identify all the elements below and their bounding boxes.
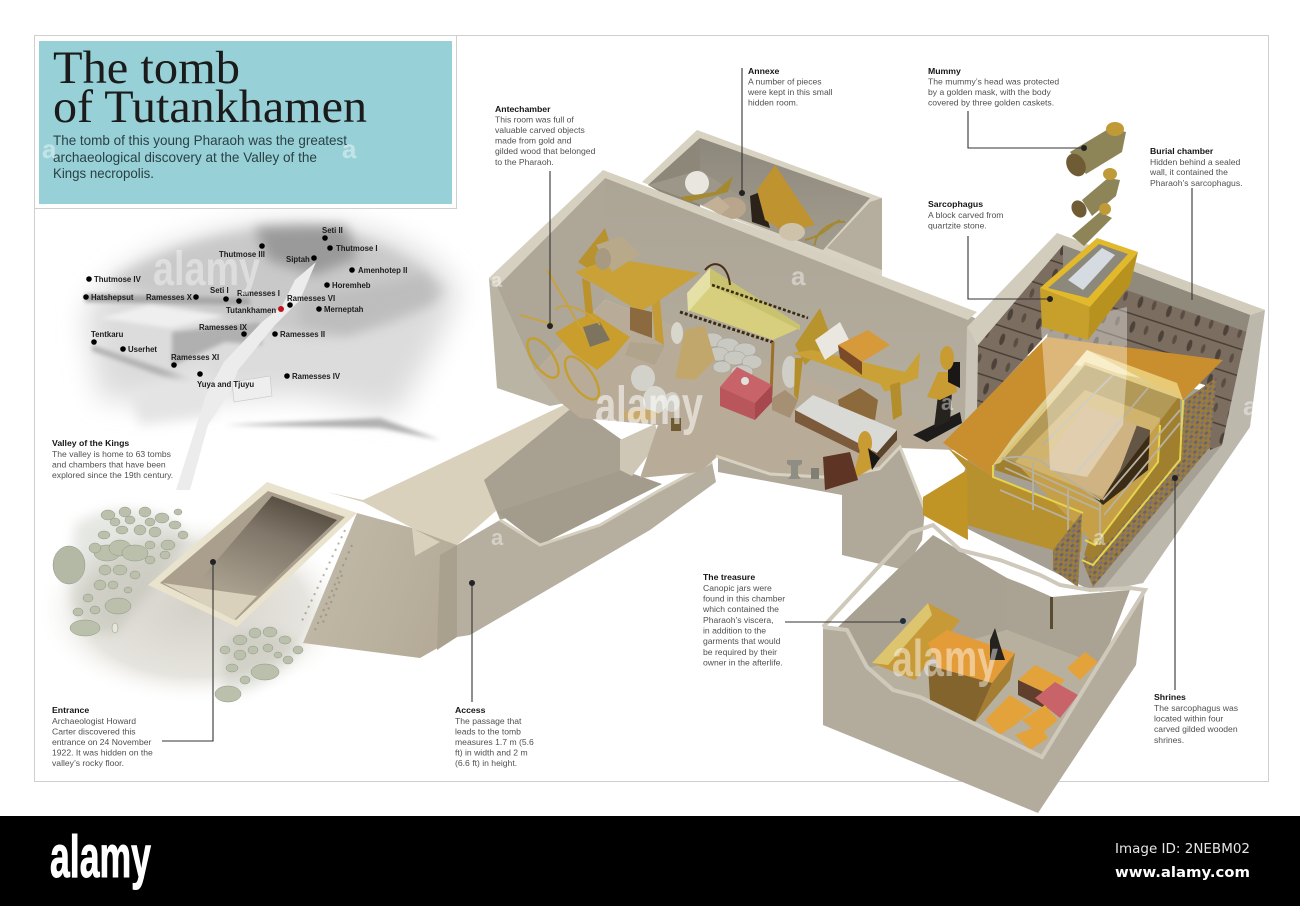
golden caskets [1062,122,1126,246]
callout: antechamber: gilded wood that belonged [495,146,596,156]
shrine front panel [948,448,1083,552]
treasure dark door slit [1050,597,1053,629]
callout: treasure: be required by their [703,647,777,657]
passage top slab [327,402,574,545]
callout: mummy: covered by three golden caskets. [928,98,1054,108]
shrine roof [943,337,1223,477]
mural left wall [977,245,1063,410]
callout: entrance: Archaeologist Howard [52,716,136,726]
light beam [1041,307,1127,477]
callout: shrines: shrines. [1154,735,1184,745]
callout: access: (6.6 ft) in height. [455,758,517,768]
glass roof [1005,362,1180,497]
callout: valley of the kings: The valley is home to 63 tombs [52,449,171,459]
watermarks: a [791,261,806,291]
map labels: Tutankhamen [226,306,276,315]
antechamber front wall [718,448,925,570]
guardian statue left [913,346,962,442]
callout: mummy: by a golden mask, with the body [928,87,1051,97]
map labels: Yuya and Tjuyu [197,380,254,389]
map side track [232,376,272,402]
callout: shrines: carved gilded wooden [1154,724,1238,734]
callout: burial chamber: Hidden behind a sealed [1150,157,1241,167]
watermarks: a [1243,391,1258,421]
annexe floor area [648,170,823,250]
callout: access: The passage that [455,716,522,726]
rubble left [53,507,188,636]
title panel: of Tutankhamen [53,81,367,133]
burial rim [967,233,1265,345]
watermarks: alamy [892,630,998,688]
callout: sarcophagus: Sarcophagus [928,199,983,209]
callout: valley of the kings: Valley of the Kings [52,438,129,448]
callout: entrance: entrance on 24 November [52,737,152,747]
title: The tomb [53,42,240,94]
access corner face [437,545,457,650]
map labels: Ramesses IX [199,323,248,332]
callout: entrance: valley’s rocky floor. [52,758,124,768]
callout: annexe: Annexe [748,66,780,76]
map labels: Hatshepsut [91,293,134,302]
callout: treasure [702,572,906,668]
callout: burial chamber: Burial chamber [1150,146,1214,156]
callout: access: Access [455,705,486,715]
right lion couch [772,308,920,420]
map labels: Siptah [286,255,310,264]
slab small triangle [412,528,440,556]
annexe objects [680,165,845,245]
map labels: Seti I [210,286,229,295]
callout: sarcophagus: A block carved from [928,210,1003,220]
watermarks: a [42,134,57,164]
passage door jamb [620,424,660,476]
callout: shrines: located within four [1154,714,1223,724]
watermarks: alamy [153,243,260,296]
callout: shrines [1154,475,1238,745]
antechamber back wall [605,177,975,440]
map labels: Ramesses X [146,293,193,302]
callout: access: ft) in width and 2 m [455,748,528,758]
title panel: archaeological discovery at the Valley of the [53,150,317,165]
burial left speckled wall end [965,327,978,420]
panel: valley map [83,223,458,490]
shrine right door [1053,513,1082,587]
callout: sarcophagus [928,199,1053,302]
callout: mummy: The mummy’s head was protected [928,76,1059,86]
footer bar [0,816,1300,906]
callout: annexe: hidden room. [748,98,798,108]
site url: www.alamy.com [1115,865,1250,881]
callout: annexe: were kept in this small [747,87,833,97]
watermarks: alamy [595,376,703,436]
title panel: Kings necropolis. [53,166,154,181]
page frame [34,36,1268,782]
entrance ground [35,515,355,705]
map labels: Ramesses VI [287,294,335,303]
callout: burial chamber [1149,146,1243,300]
burial floor [950,350,1250,590]
title panel [34,36,456,208]
roof light edge [993,350,1183,465]
callout: entrance: 1922. It was hidden on the [52,748,153,758]
map labels [83,226,407,389]
shrine interior [995,362,1180,560]
callout: entrance: Entrance [52,705,89,715]
callout: valley of the kings [52,438,173,480]
watermarks: a [1093,525,1106,550]
callout: sarcophagus: quartzite stone. [928,220,987,230]
antechamber outer left wall [489,278,570,406]
treasure back left wall [838,535,1007,668]
stone sarcophagus [1043,405,1137,500]
callout: antechamber: Antechamber [495,104,551,114]
map labels: Thutmose III [219,250,265,259]
callout: antechamber [495,104,596,329]
antechamber floor [535,300,970,478]
left lion couch [575,228,700,345]
callout: shrines: Shrines [1154,692,1186,702]
stone sarcophagus lid box [1040,238,1138,340]
antechamber left wall [497,178,605,372]
white topped table [795,395,897,462]
map labels: Amenhotep II [358,266,407,275]
treasure outer wall [823,590,1145,813]
panel: entrance and access passage [148,402,716,658]
map labels: Userhet [128,345,157,354]
map labels: Thutmose IV [94,275,142,284]
watermarks: a [941,390,954,415]
treasure floor [868,630,1100,757]
map labels: Merneptah [324,305,364,314]
callout: annexe: A number of pieces [748,76,822,86]
central couch [680,264,808,396]
watermarks: a [491,525,504,550]
callout: shrines: The sarcophagus was [1154,703,1238,713]
passage front wall [457,462,716,637]
callout: valley of the kings: and chambers that have been [52,460,166,470]
sloping access wall [303,513,457,658]
callout: burial chamber: Pharaoh’s sarcophagus. [1150,178,1243,188]
burial right wall [1100,310,1265,592]
inner dark gap [1050,420,1150,505]
callout: entrance: Carter discovered this [52,726,136,736]
map labels: Horemheb [332,281,371,290]
callout: antechamber: made from gold and [495,136,572,146]
bright yellow shrine outline [993,400,1183,565]
callout: valley of the kings: explored since the 19th century. [52,470,173,480]
mural back wall [1047,245,1250,450]
callout: treasure: The treasure [703,572,755,582]
passage inner wall [484,406,622,520]
callout: annexe [739,66,833,196]
passage crumbled edge [500,462,712,545]
passage floor [497,470,662,545]
annexe rim [642,130,882,276]
treasure objects [872,603,1098,750]
footer logo: alamy [50,824,151,890]
chariot [520,270,630,405]
rubble bottom [215,627,303,702]
map labels: Ramesses II [280,330,325,339]
intro text: The tomb of this young Pharaoh was the greatest [53,133,347,148]
callout: mummy [928,66,1087,151]
panel: annexe [642,130,882,276]
annexe outer side [827,198,882,270]
callout: treasure: Canopic jars were [703,583,772,593]
callout: antechamber: This room was full of [495,114,574,124]
treasure back right wall [1007,578,1130,670]
watermarks: a [491,270,503,292]
callout: treasure: in addition to the [703,626,766,636]
back wall upper shadow band [1063,245,1250,332]
map labels: Ramesses IV [292,372,341,381]
panel: treasure chamber [823,525,1145,813]
callout: mummy: Mummy [928,66,961,76]
red chest [720,367,772,420]
panel: burial chamber [923,122,1265,592]
map labels: Tentkaru [91,330,124,339]
map valley road [176,262,316,490]
callout: access: measures 1.7 m (5.6 [455,737,534,747]
map labels: Ramesses I [237,289,280,298]
watermarks [42,134,1258,688]
watermarks: a [342,134,357,164]
slope speckle [300,530,352,630]
callout: treasure: found in this chamber [703,594,785,604]
antechamber rim [489,170,977,320]
callout: burial chamber: wall, it contained the [1149,167,1228,177]
shrine side brickwork [1082,377,1217,587]
guardian statue right [852,431,880,480]
callout: treasure: garments that would [703,636,781,646]
callout: antechamber: to the Pharaoh. [495,157,554,167]
callout: access [455,580,534,768]
inner shrine layer [1015,390,1160,545]
callout: treasure: which contained the [702,604,779,614]
callout: treasure: Pharaoh’s viscera, [703,615,774,625]
image id: Image ID: 2NEBM02 [1115,842,1250,857]
annexe left wall [648,138,700,215]
annexe back wall [700,138,870,250]
callout: antechamber: valuable carved objects [495,125,585,135]
grey frame bars [1000,375,1180,545]
chair and jars [622,322,715,431]
antechamber crumbled rim [716,447,925,510]
callout: access: leads to the tomb [455,726,521,736]
treasure rim [823,525,1145,757]
map labels: Thutmose I [336,244,378,253]
map labels: Ramesses XI [171,353,219,362]
shrine left door [923,470,968,540]
panel: antechamber [489,170,977,570]
map terrain [85,223,458,440]
map labels: Seti II [322,226,343,235]
brown chest and grey pots [787,452,858,490]
callout: entrance [52,559,216,768]
callout: treasure: owner in the afterlife. [703,658,783,668]
entrance stair pit [148,482,357,627]
